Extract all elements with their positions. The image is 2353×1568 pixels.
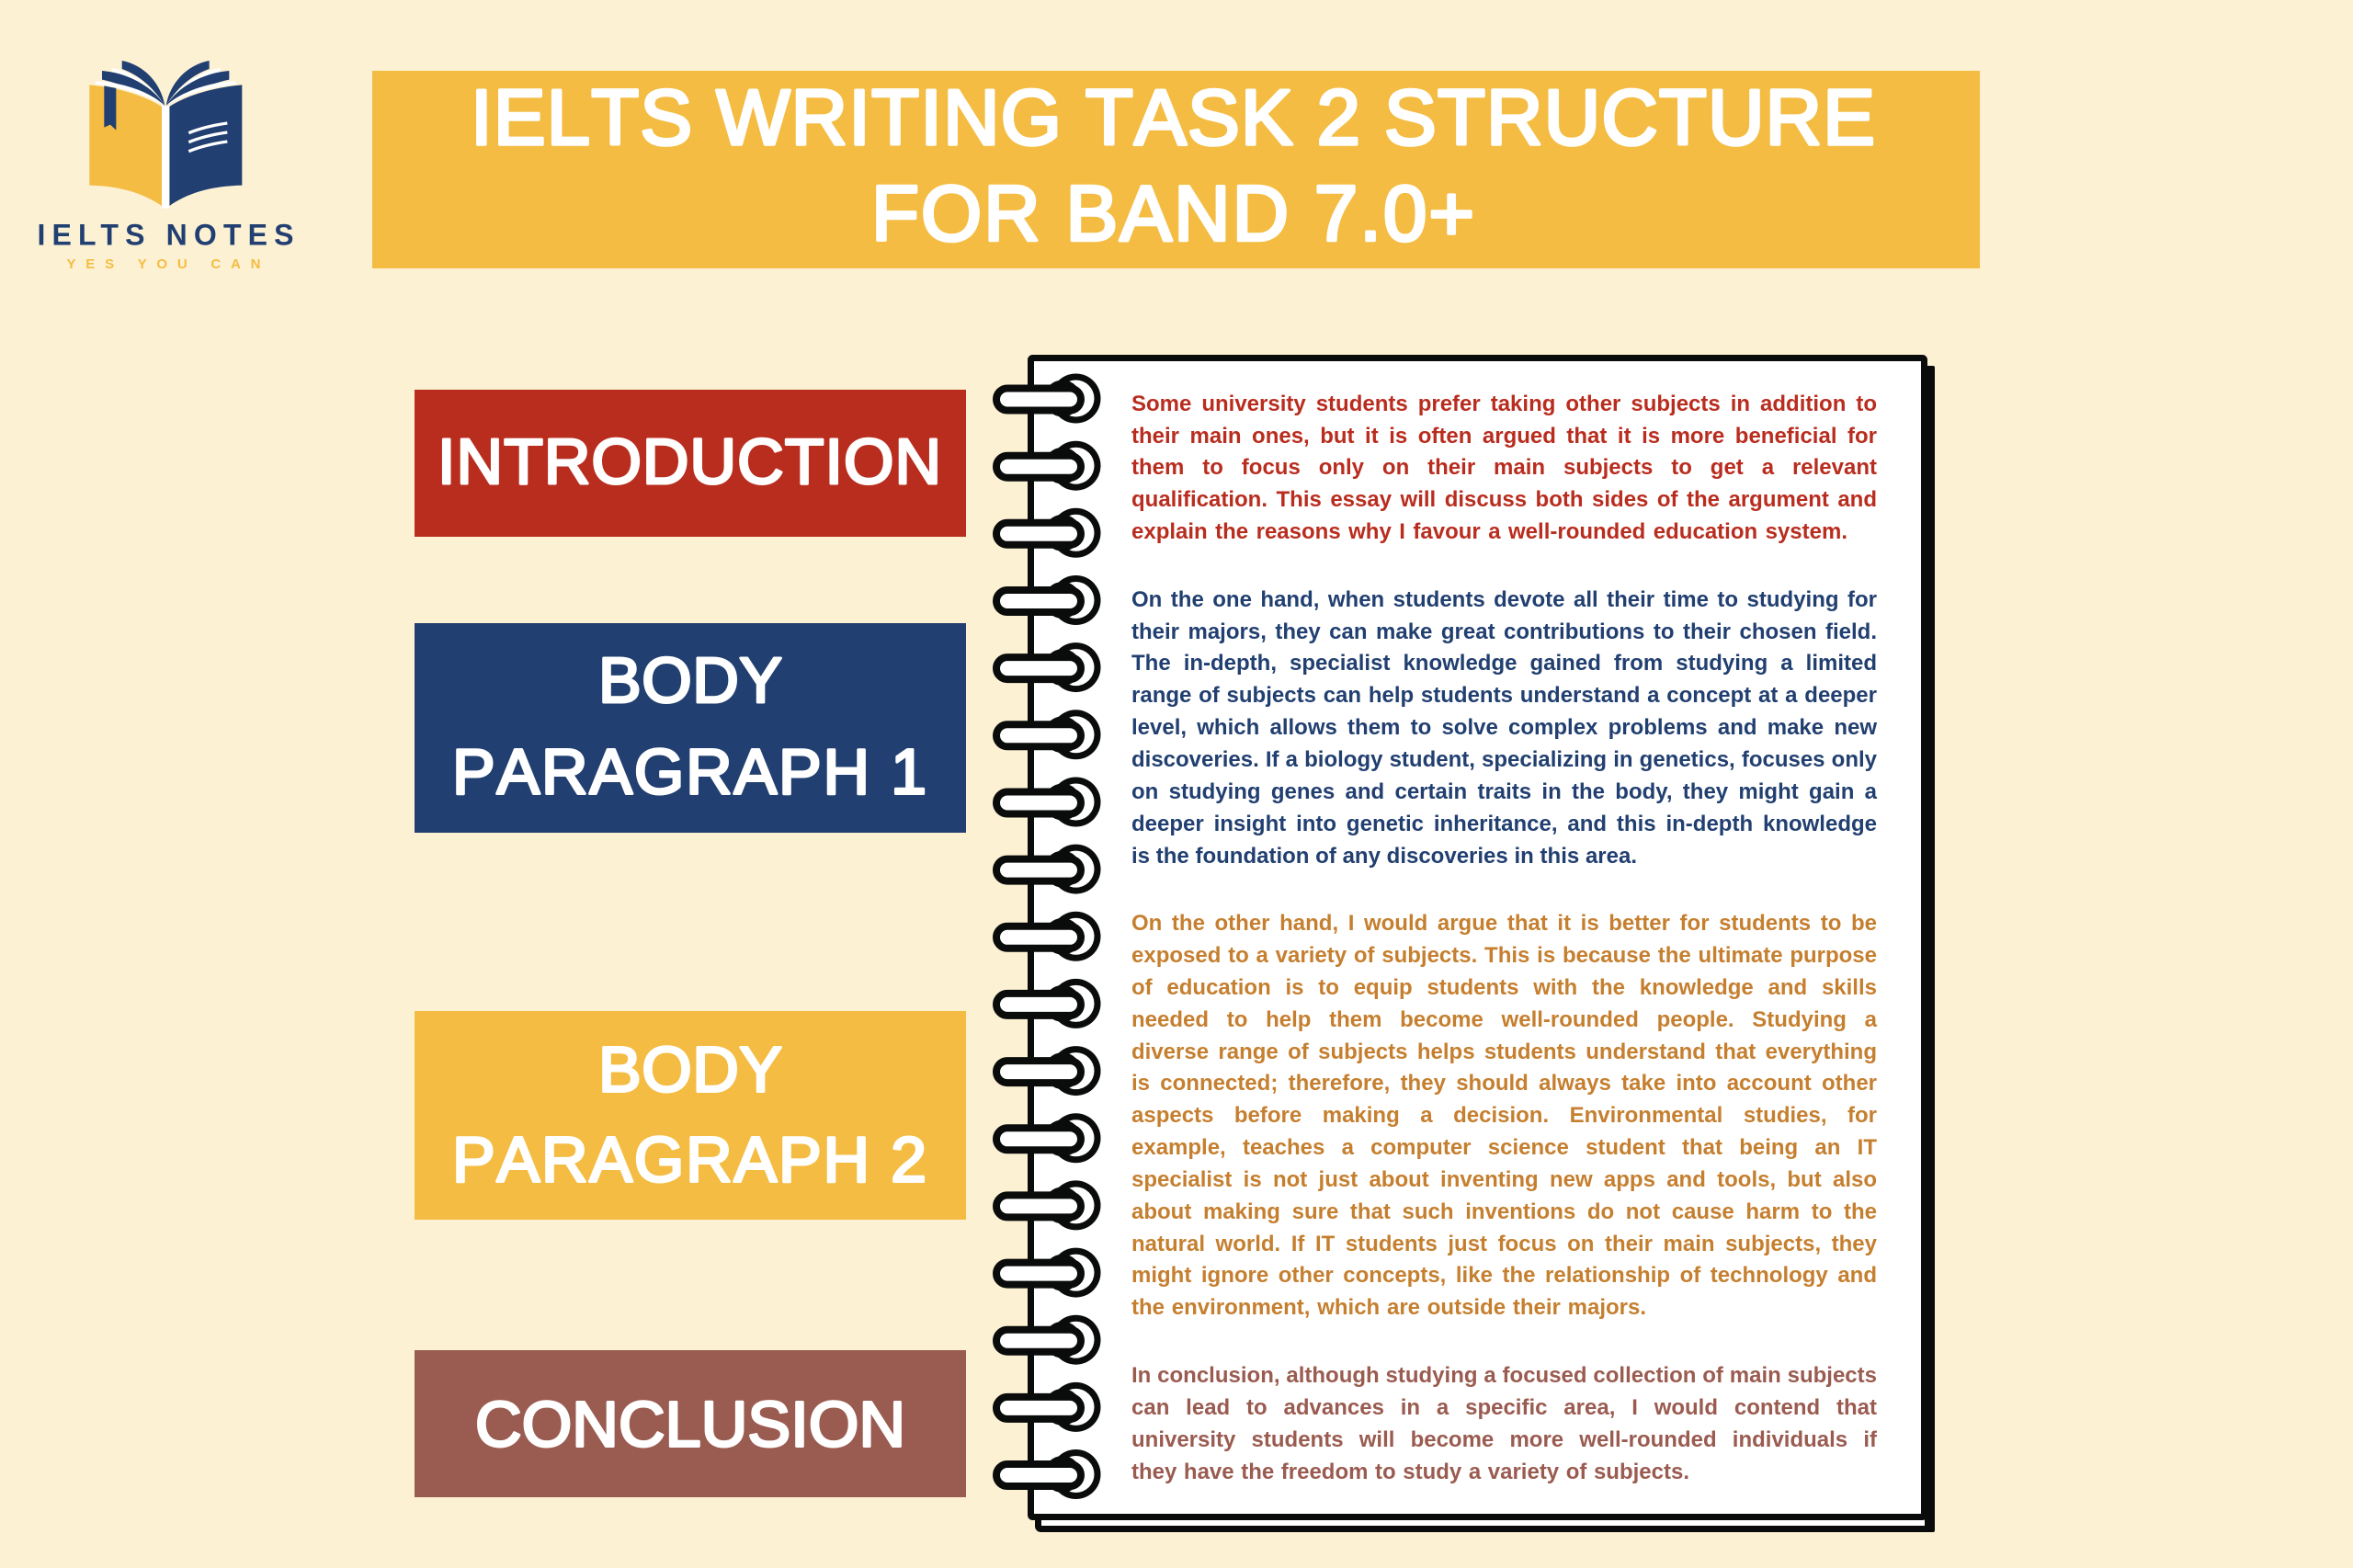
spiral rings	[996, 373, 1101, 1499]
text block: introduction paragraph: explain the reasons why I favour a well-rounded education system.	[1131, 519, 1847, 544]
text block: body paragraph 1: range of subjects can help students understand a concept at a deeper	[1131, 683, 1877, 708]
icon: open book	[89, 61, 242, 209]
label: introduction	[415, 390, 966, 537]
text block: introduction paragraph: qualification. This essay will discuss both sides of the argument and	[1131, 487, 1877, 512]
text block: body paragraph 1: their majors, they can make great contributions to their chosen field.	[1131, 619, 1877, 644]
text block: body paragraph 2: diverse range of subjects helps students understand that everything	[1131, 1040, 1877, 1064]
label: body paragraph 2: PARAGRAPH 2	[452, 1123, 926, 1195]
text block: body paragraph 2: aspects before making a decision. Environmental studies, for	[1131, 1103, 1877, 1128]
text block: body paragraph 2	[1131, 911, 1877, 1320]
logo wordmark: IELTS NOTES	[37, 219, 294, 252]
logo tagline: YES YOU CAN	[66, 256, 261, 272]
text block: body paragraph 2: might ignore other concepts, like the relationship of technology and	[1131, 1263, 1877, 1288]
text block: conclusion paragraph: can lead to advances in a specific area, I would contend that	[1131, 1395, 1877, 1420]
text block: body paragraph 2: about making sure that such inventions do not cause harm to the	[1131, 1199, 1877, 1224]
label: body paragraph 1: BODY	[598, 644, 782, 716]
text block: body paragraph 2: natural world. If IT students just focus on their main subjects, they	[1131, 1232, 1877, 1256]
text block: body paragraph 1: On the one hand, when students devote all their time to studying for	[1131, 587, 1877, 612]
logo: IELTS Notes	[37, 61, 294, 272]
text block: body paragraph 2: the environment, which are outside their majors.	[1131, 1295, 1646, 1320]
text block: body paragraph 2: specialist is not just about inventing new apps and tools, but also	[1131, 1167, 1877, 1192]
text block: body paragraph 1: level, which allows them to solve complex problems and make new	[1131, 715, 1877, 740]
text block: introduction paragraph: them to focus only on their main subjects to get a relevant	[1131, 455, 1877, 480]
text block: conclusion paragraph: university students will become more well-rounded individuals if	[1131, 1427, 1877, 1452]
text block: body paragraph 1: on studying genes and certain traits in the body, they might gain a	[1131, 779, 1877, 804]
label: body paragraph 1	[415, 623, 966, 833]
label: body paragraph 2	[415, 1011, 966, 1220]
label: body paragraph 2: BODY	[598, 1033, 782, 1105]
text block: body paragraph 1: deeper insight into genetic inheritance, and this in-depth knowledge	[1131, 812, 1877, 836]
text block: introduction paragraph: their main ones, but it is often argued that it is more beneficial for	[1131, 424, 1877, 449]
notebook back sheet	[1039, 366, 1935, 1532]
label: conclusion: CONCLUSION	[475, 1388, 905, 1460]
text block: introduction paragraph	[1131, 392, 1877, 544]
label: conclusion	[415, 1350, 966, 1497]
text block: body paragraph 1: The in-depth, specialist knowledge gained from studying a limited	[1131, 651, 1877, 676]
label: introduction: INTRODUCTION	[438, 426, 941, 497]
text block: body paragraph 2: example, teaches a computer science student that being an IT	[1131, 1135, 1877, 1160]
text block: body paragraph 2: needed to help them become well-rounded people. Studying a	[1131, 1007, 1877, 1032]
title banner: FOR BAND 7.0+	[871, 171, 1474, 257]
text block: body paragraph 2: is connected; therefore, they should always take into account other	[1131, 1071, 1877, 1096]
notebook	[996, 358, 1935, 1532]
text block: body paragraph 1	[1131, 587, 1877, 869]
text block: conclusion paragraph	[1131, 1363, 1877, 1484]
text block: body paragraph 2: of education is to equip students with the knowledge and skills	[1131, 975, 1877, 1000]
text block: introduction paragraph: Some university students prefer taking other subjects in addition to	[1131, 392, 1877, 416]
label: body paragraph 1: PARAGRAPH 1	[452, 735, 926, 807]
text block: body paragraph 1: discoveries. If a biology student, specializing in genetics, focuses only	[1131, 747, 1877, 772]
title banner: IELTS WRITING TASK 2 STRUCTURE	[471, 74, 1875, 162]
text block: conclusion paragraph: In conclusion, although studying a focused collection of main subjects	[1131, 1363, 1877, 1388]
text block: body paragraph 2: exposed to a variety of subjects. This is because the ultimate purpose	[1131, 943, 1877, 968]
text block: conclusion paragraph: they have the freedom to study a variety of subjects.	[1131, 1460, 1689, 1484]
text block: body paragraph 2: On the other hand, I would argue that it is better for students to be	[1131, 911, 1877, 936]
notebook front page	[1031, 358, 1925, 1517]
title banner	[372, 71, 1980, 268]
text block: body paragraph 1: is the foundation of any discoveries in this area.	[1131, 844, 1637, 869]
